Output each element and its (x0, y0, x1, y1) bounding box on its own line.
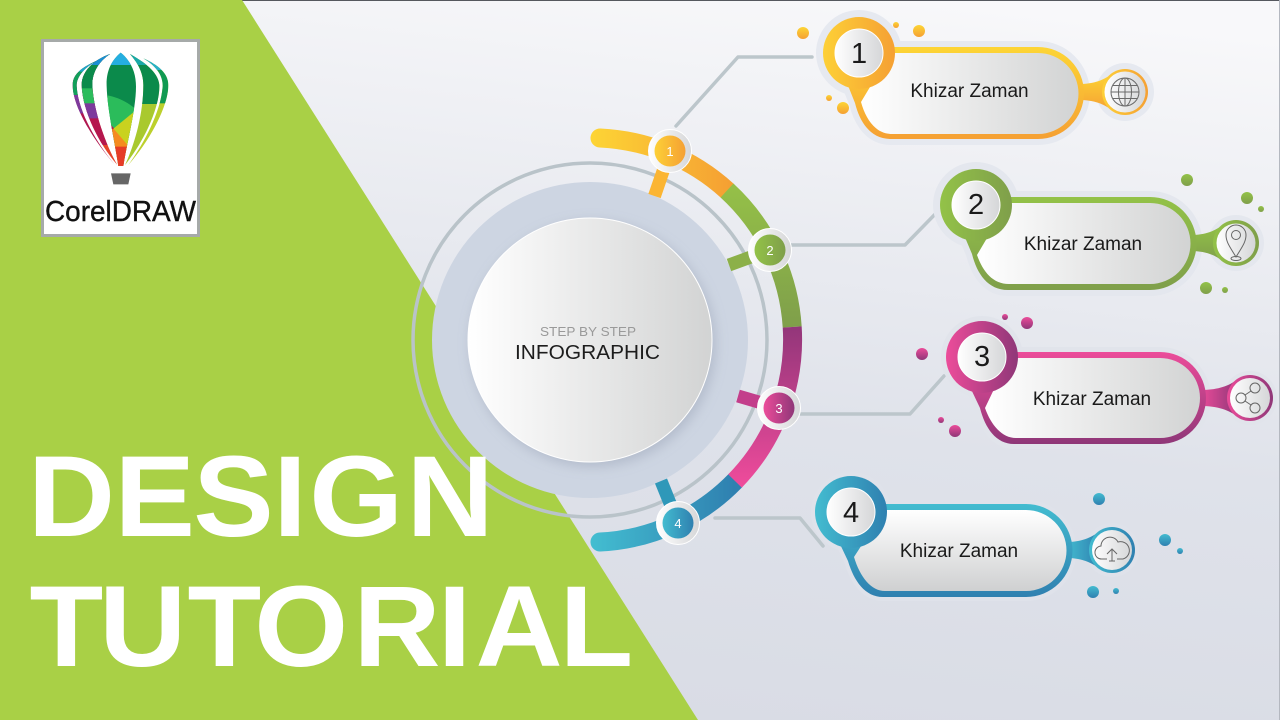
icon: hot air balloon (70, 50, 170, 184)
step node 4: 4 (674, 516, 682, 531)
hub title: INFOGRAPHIC (515, 342, 660, 364)
step node 1 (648, 130, 692, 172)
outer thin ring (413, 163, 767, 517)
step node 2 (748, 228, 792, 272)
connector lines (676, 57, 945, 546)
card 4 name: Khizar Zaman (900, 541, 1018, 562)
icon: share (1227, 375, 1273, 421)
number 4: 4 (843, 497, 859, 529)
card 3 dots (916, 314, 1033, 437)
stubs linking nodes to hub (654, 151, 779, 523)
number 1: 1 (851, 38, 867, 70)
CorelDRAW logo (42, 40, 198, 236)
blue disc (432, 182, 748, 498)
headline: DESIGN: DESIGN (28, 432, 494, 560)
step node 3 (758, 386, 800, 430)
icon: cloud upload (1089, 527, 1135, 573)
icon: globe (1102, 69, 1148, 115)
hub subtitle: STEP BY STEP (540, 324, 636, 339)
card 2 dots (1181, 174, 1264, 294)
logo wordmark: CorelDRAW (45, 196, 197, 228)
card 3 (941, 316, 1277, 444)
card 1 (816, 10, 1154, 139)
headline: TUTORIAL: TUTORIAL (30, 562, 633, 690)
icon: map pin (1213, 220, 1259, 266)
step node 4 (656, 502, 700, 544)
card 4 dots (1087, 493, 1183, 598)
card 2 (933, 162, 1264, 290)
step node 3: 3 (775, 401, 783, 416)
number 2: 2 (968, 189, 984, 221)
step node 1: 1 (666, 144, 674, 159)
card 1 dots (797, 22, 925, 114)
central hub (413, 163, 767, 517)
card 3 name: Khizar Zaman (1033, 389, 1151, 410)
card 2 name: Khizar Zaman (1024, 234, 1142, 255)
white centre disc (468, 218, 712, 462)
segmented outer arc (600, 138, 793, 542)
card 1 name: Khizar Zaman (910, 81, 1029, 102)
number 3: 3 (974, 341, 990, 373)
green diagonal panel (0, 0, 698, 720)
card 4 (811, 472, 1139, 597)
step node 2: 2 (766, 243, 774, 258)
